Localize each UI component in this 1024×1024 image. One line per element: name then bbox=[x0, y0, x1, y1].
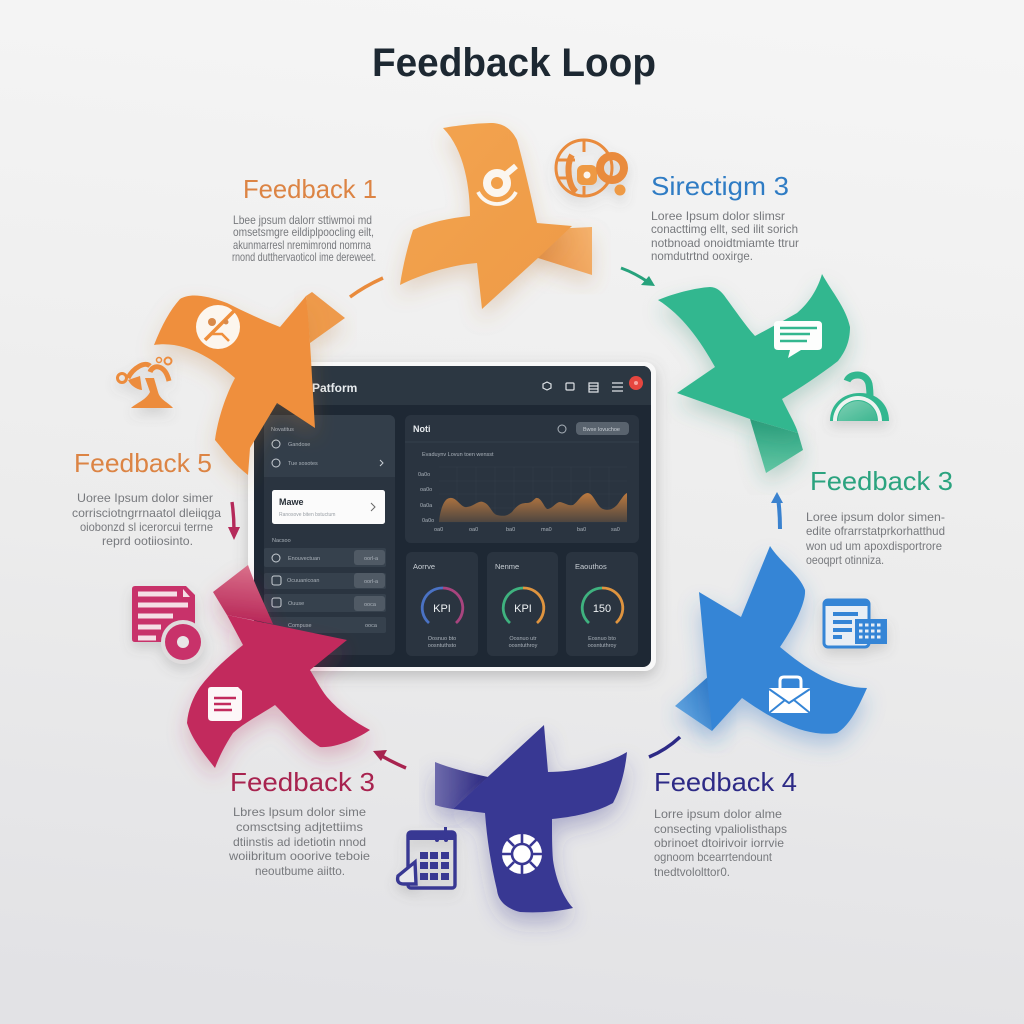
panel: orange left ribbon bbox=[154, 292, 345, 475]
icon: broken face badge bbox=[196, 305, 240, 349]
panel: blue ribbon bbox=[675, 546, 867, 734]
text block: Feedback 5 bbox=[72, 491, 221, 548]
text block: Feedback 1: rnond dutthervaoticol ime dereweet. bbox=[232, 250, 376, 264]
icon: orange cloud gears bbox=[556, 140, 626, 196]
text block: Feedback 3 crimson: Lbres lpsum dolor sime bbox=[233, 805, 366, 819]
text block: Feedback 5: oiobonzd sl icerorcui terrne bbox=[80, 520, 213, 534]
text block: Feedback 1 bbox=[232, 213, 376, 264]
KPI card 2: Oosnuo utr bbox=[509, 636, 537, 642]
dashboard header bar: Patform bbox=[312, 381, 357, 395]
area chart: 0a0o bbox=[418, 472, 430, 478]
text block: Feedback 4: Lorre ipsum dolor alme bbox=[654, 807, 782, 821]
text block: Feedback 4: obrinoet dtoirivoir iorrvie bbox=[654, 836, 784, 850]
text block: Feedback 3 crimson: comsctsing adjtettiims bbox=[236, 820, 363, 834]
text block: Sirectigm 3: Loree Ipsum dolor slimsr bbox=[651, 209, 785, 223]
text block: Feedback 4: ognoom bcearrtendount bbox=[654, 850, 773, 864]
sidebar panel: Gandose bbox=[288, 442, 310, 448]
KPI card 3 bbox=[566, 552, 638, 656]
sidebar panel: Tue sosotes bbox=[288, 461, 318, 467]
text block: Feedback 3 green: edite ofrarrstatprkorhatthud bbox=[806, 524, 945, 538]
area chart: oa0o bbox=[420, 487, 432, 493]
dashboard header bar bbox=[254, 366, 651, 405]
text block: Feedback 3 crimson: dtiinstis ad idetiotin nnod bbox=[233, 835, 366, 849]
heading: Feedback 3 green: Feedback 3 bbox=[810, 466, 953, 496]
heading: Feedback 5: Feedback 5 bbox=[74, 448, 212, 478]
KPI card 3: Eosnuo bto bbox=[588, 636, 616, 642]
text block: Feedback 5: corrisciotngrrnaatol dleiiqga bbox=[72, 506, 221, 520]
icon: orange plant lamp bbox=[118, 358, 173, 408]
icon: green hanger bbox=[830, 375, 889, 421]
heading: Feedback 1: Feedback 1 bbox=[243, 174, 377, 204]
text block: Feedback 3 green: won ud um apoxdisportrore bbox=[805, 539, 942, 553]
text block: Feedback 1: akunmarresl nremimrond nomrna bbox=[233, 238, 371, 252]
text block: Feedback 3 crimson bbox=[228, 805, 370, 878]
text block: Feedback 5: Uoree Ipsum dolor simer bbox=[77, 491, 213, 505]
title: Feedback Loop bbox=[372, 41, 656, 85]
icon: briefcase envelope bbox=[769, 677, 810, 713]
text block: Feedback 3 green: oeoqprt otinniza. bbox=[806, 553, 884, 567]
white card bbox=[272, 490, 385, 524]
text block: Feedback 1: Lbee jpsum dalorr sttiwmoi md bbox=[233, 213, 372, 227]
arrow: green bbox=[621, 268, 655, 286]
text block: Feedback 4: consecting vpaliolisthaps bbox=[654, 822, 787, 836]
sidebar panel: Novatitus bbox=[271, 427, 294, 433]
sidebar panel: Nacsoo bbox=[272, 538, 291, 544]
area chart: ba0 bbox=[577, 527, 586, 533]
sidebar rows: Ouuse bbox=[288, 601, 304, 607]
sidebar rows: Enouvectuan bbox=[288, 556, 320, 562]
sidebar rows: Ocuuanicoan bbox=[287, 578, 319, 584]
KPI card 2: KPI bbox=[514, 603, 532, 615]
arrow: blue up bbox=[771, 492, 783, 529]
icon: indigo calendar bbox=[398, 827, 455, 888]
text block: Sirectigm 3: nomdutrtnd ooxirge. bbox=[651, 249, 753, 263]
arrow: navy arc bbox=[649, 737, 680, 757]
text block: Feedback 4: tnedtvololttor0. bbox=[654, 865, 730, 879]
area chart: ba0 bbox=[506, 527, 515, 533]
sidebar rows: ooca bbox=[364, 602, 377, 608]
white card: Mawe bbox=[279, 497, 304, 507]
area chart: 0a0a bbox=[420, 503, 433, 509]
KPI card 2: Nenme bbox=[495, 562, 519, 571]
KPI card 1: Aorrve bbox=[413, 562, 435, 571]
sidebar panel bbox=[264, 415, 395, 655]
sidebar rows: Compuse bbox=[288, 623, 312, 629]
text block: Sirectigm 3: conacttimg ellt, sed ilit sorich bbox=[651, 222, 798, 236]
KPI card 1 bbox=[406, 552, 478, 656]
chart panel bbox=[405, 415, 639, 543]
KPI card 2: oosntuthroy bbox=[509, 643, 538, 649]
icon: document bbox=[208, 687, 242, 721]
text block: Feedback 3 green: Loree ipsum dolor simen- bbox=[806, 510, 945, 524]
chart panel: Noti bbox=[413, 424, 430, 434]
text block: Feedback 4 bbox=[654, 807, 787, 879]
area chart: oa0 bbox=[434, 527, 443, 533]
area chart: ma0 bbox=[541, 527, 552, 533]
white card: Ranosove biten bstuctum bbox=[279, 512, 335, 518]
KPI card 1: oosntuthsto bbox=[428, 643, 456, 649]
area chart bbox=[418, 467, 627, 533]
panel: green ribbon bbox=[658, 274, 850, 473]
panel: platform dashboard bbox=[248, 362, 656, 671]
panel: crimson ribbon bbox=[187, 565, 370, 768]
arrow: crimson down bbox=[228, 502, 240, 540]
sidebar rows bbox=[264, 548, 386, 633]
text block: Feedback 3 crimson: woiibritum ooorive teboie bbox=[228, 849, 370, 863]
icon: target bbox=[478, 166, 516, 204]
KPI card 1: Oosnuo bto bbox=[428, 636, 456, 642]
sidebar rows: oorl-a bbox=[364, 579, 379, 585]
panel: indigo ribbon bbox=[435, 725, 627, 912]
KPI card 3: 150 bbox=[593, 603, 611, 615]
icon: segmented wheel bbox=[499, 831, 545, 877]
text block: Sirectigm 3: notbnoad onoidtmiamte ttrur bbox=[651, 236, 799, 250]
text block: Feedback 1: omsetsmgre eildiplpoocling eilt, bbox=[233, 225, 374, 239]
KPI card 1: KPI bbox=[433, 603, 451, 615]
arrow: orange arc bbox=[350, 278, 383, 297]
text block: Feedback 3 crimson: neoutbume aiitto. bbox=[255, 864, 345, 878]
icon: blue document and calendar bbox=[824, 600, 887, 647]
heading: Sirectigm 3: Sirectigm 3 bbox=[651, 171, 789, 201]
KPI card 2 bbox=[487, 552, 558, 656]
arrow: crimson left bbox=[373, 750, 406, 768]
area chart: 0a0o bbox=[422, 518, 434, 524]
heading: Feedback 3 crimson: Feedback 3 bbox=[230, 767, 375, 797]
sidebar rows: oorl-a bbox=[364, 556, 379, 562]
KPI card 3: Eaouthos bbox=[575, 562, 607, 571]
panel: orange top ribbon bbox=[400, 123, 592, 309]
icon: chat bubble bbox=[774, 321, 822, 358]
heading: Feedback 4: Feedback 4 bbox=[654, 767, 797, 797]
text block: Feedback 3 green bbox=[805, 510, 945, 567]
area chart: oa0 bbox=[469, 527, 478, 533]
icon: crimson document and disc bbox=[132, 586, 205, 664]
text block: Feedback 5: reprd ootiiosinto. bbox=[102, 534, 193, 548]
text block: Sirectigm 3 bbox=[651, 209, 799, 263]
KPI card 3: oosntuthroy bbox=[588, 643, 617, 649]
chart panel: Bwxe lovuchoe bbox=[583, 427, 620, 433]
sidebar rows: ooca bbox=[365, 623, 378, 629]
area chart: sa0 bbox=[611, 527, 620, 533]
chart panel: Evaduynv Lovun toen wensst bbox=[422, 452, 494, 458]
